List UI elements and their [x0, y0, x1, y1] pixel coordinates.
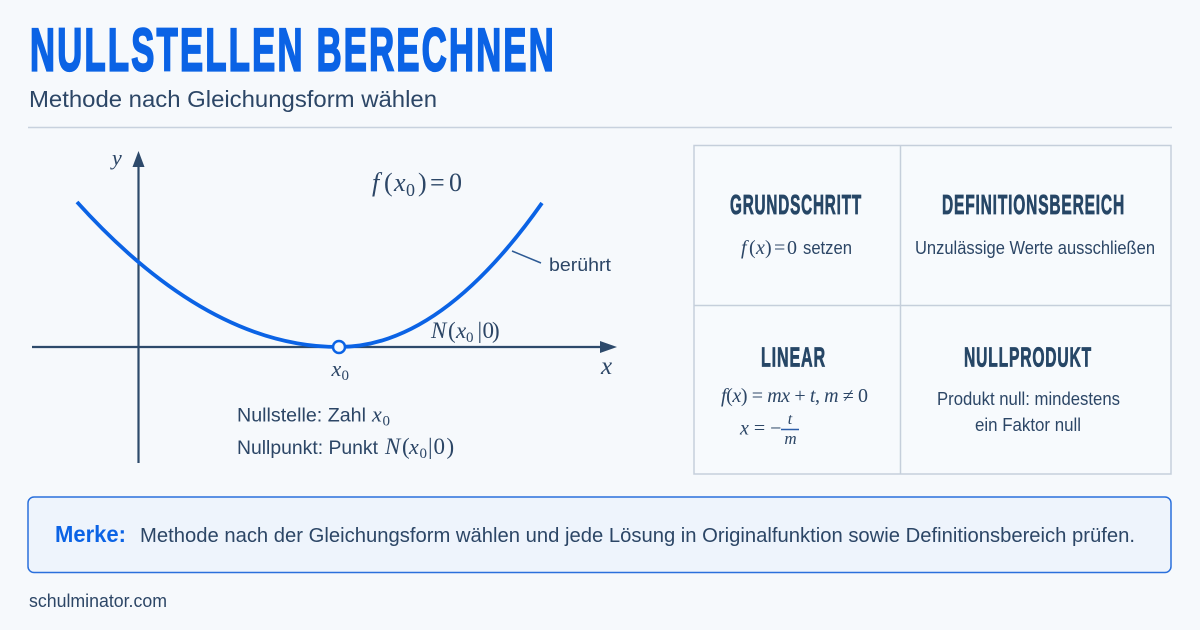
parabola curve — [77, 202, 542, 347]
formula: f(x)=0 setzen: ) — [765, 237, 772, 259]
formula: f(x)=0 setzen: setzen — [803, 238, 852, 258]
definition: Nullpunkt: 0 — [420, 446, 427, 462]
formula: x=-t/m: m — [784, 429, 797, 448]
label: N(x0|0): | — [478, 318, 482, 343]
y-axis — [132, 151, 144, 463]
text: Unzulässige Werte: Unzulässige Werte ausschließen — [915, 238, 1155, 258]
x-axis label: x — [600, 353, 612, 380]
panel: method grid — [694, 146, 1171, 474]
formula: f(x0)=0: ( — [384, 168, 393, 197]
heading: Nullprodukt: NULLPRODUKT — [964, 342, 1092, 372]
formula: f(x0)=0: 0 — [449, 168, 462, 197]
footer: website: schulminator.com — [29, 591, 167, 611]
formula: x=-t/m: x = − — [739, 418, 781, 440]
definition: Nullpunkt: N — [384, 434, 402, 459]
definition: Nullstelle: x — [371, 402, 382, 426]
formula: f(x0)=0: f — [372, 168, 383, 197]
label: N(x0|0): 0 — [466, 330, 474, 346]
x-axis — [32, 341, 617, 353]
cell: Definitionsbereich — [915, 189, 1155, 258]
formula: f(x0)=0: = — [430, 168, 445, 197]
definition: Nullstelle: 0 — [382, 414, 390, 430]
label: N(x0|0): 0 — [482, 318, 494, 343]
y-axis label: y — [110, 145, 122, 170]
definition: Nullpunkt: Nullpunkt: Punkt — [237, 438, 379, 459]
label: berührt: berührt — [549, 254, 611, 275]
text: ein Faktor null: ein Faktor null — [975, 415, 1081, 435]
title: NULLSTELLEN BERECHNEN — [30, 16, 556, 84]
definition: Nullpunkt: 0 — [434, 434, 445, 459]
chart: parabola touching the x-axis — [32, 145, 617, 463]
label: x0: 0 — [342, 368, 349, 384]
formula: f(x)=0 setzen: ( — [749, 237, 756, 259]
definition: Nullpunkt: ) — [446, 434, 454, 459]
formula: f(x)=mx+t: f(x) = mx + t, m ≠ 0 — [721, 385, 868, 407]
cell: Linear — [721, 342, 868, 448]
formula: f(x)=0 setzen: x — [755, 237, 765, 259]
text: Produkt null: Produkt null: mindestens — [937, 389, 1120, 409]
leader line — [512, 251, 541, 263]
formula: f(x0)=0: 0 — [406, 180, 415, 200]
label: N(x0|0): x — [455, 318, 467, 343]
heading: Linear: LINEAR — [761, 342, 826, 372]
definition: Nullpunkt: | — [428, 434, 433, 459]
formula: f(x)=0 setzen: f — [741, 237, 749, 259]
touch point marker — [333, 341, 345, 353]
subtitle: Methode nach Gleichungsform wählen — [29, 86, 437, 112]
label: Merke: Merke: — [55, 521, 126, 547]
formula: f(x0)=0: ) — [418, 168, 427, 197]
cell: Nullprodukt — [937, 342, 1120, 435]
label: N(x0|0): ( — [448, 318, 456, 343]
label: N(x0|0): ) — [492, 318, 500, 343]
formula: x=-t/m — [739, 411, 799, 448]
formula: f(x0)=0: x — [393, 168, 406, 197]
heading: Grundschritt: GRUNDSCHRITT — [730, 189, 862, 220]
label: N(x0|0): N — [430, 318, 448, 343]
formula: f(x)=0 setzen: = — [774, 237, 785, 259]
formula: x=-t/m: t — [788, 411, 793, 428]
text: callout message: Methode nach der Gleichungsform wählen und jede Lösung in Originalfunktion sowie Definitionsbereich prüfen. — [140, 525, 1135, 547]
callout: Merke — [28, 497, 1171, 572]
definition: Nullstelle: Nullstelle: Zahl — [237, 406, 366, 426]
cell: Grundschritt — [730, 189, 862, 259]
formula: f(x)=0 setzen: 0 — [787, 237, 797, 259]
label: x0: x — [330, 356, 342, 381]
definition: Nullpunkt: x — [408, 434, 419, 459]
definition: Nullpunkt: ( — [402, 434, 410, 459]
